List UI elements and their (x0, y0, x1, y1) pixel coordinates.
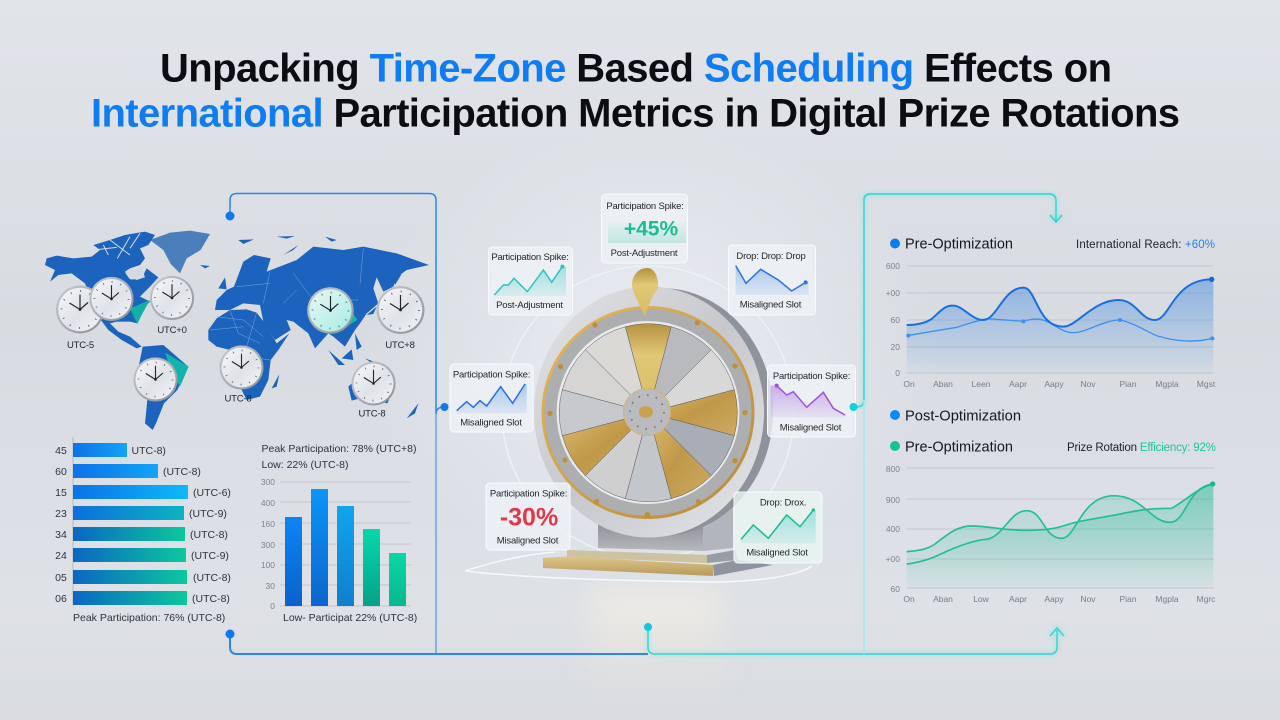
card: -30% drop: Misaligned Slot (497, 536, 559, 546)
callout: prize rotation efficiency: Prize Rotation Efficiency: 92% (1067, 442, 1216, 454)
columns (285, 489, 406, 606)
callout cards (450, 194, 856, 563)
connector node: teal dot on card edge (850, 403, 858, 411)
y axis (886, 464, 900, 594)
wheel stand (543, 505, 773, 576)
map continents (45, 231, 429, 430)
bar values: 60 (55, 466, 67, 478)
card: drop trend (728, 245, 816, 315)
bar values: 06 (55, 593, 67, 605)
column axis: 30 (266, 581, 275, 591)
card: post-adjustment trend: Participation Spike: (491, 252, 569, 263)
y axis: 900 (886, 495, 900, 505)
bar time zone labels: (UTC-8) (163, 466, 201, 478)
x axis: Pian (1119, 594, 1137, 604)
bar values: 23 (55, 508, 67, 520)
clock: Australia (351, 361, 396, 406)
column chart heading: Peak Participation: 78% (UTC+8) (262, 443, 416, 455)
pre-optimization reach chart (886, 236, 1216, 389)
wheel segments (559, 324, 737, 502)
x axis: Leen (972, 379, 991, 389)
column axis: 100 (261, 560, 275, 570)
clock: UTC+0 (150, 276, 194, 320)
column axis: 400 (261, 498, 275, 508)
card: +45% spike: Participation Spike: (606, 201, 684, 212)
x axis: Low (973, 594, 990, 604)
clock labels: UTC-8 (225, 394, 251, 404)
card: -30% drop: -30% (500, 504, 558, 532)
x axis: Aapr (1009, 594, 1027, 604)
x axis: On (903, 594, 915, 604)
title: International Participation Metrics in Digital Prize Rotations (91, 92, 1180, 136)
card: drop trend lower right (734, 492, 822, 563)
x axis: Aapy (1044, 379, 1064, 389)
wheel hub (623, 388, 671, 436)
card: drop trend: Misaligned Slot (740, 300, 802, 310)
callout: international reach: International Reach: +60% (1076, 239, 1215, 251)
card: misaligned slot right: Participation Spike: (773, 371, 850, 382)
y axis: 60 (891, 315, 900, 325)
y axis: 600 (886, 261, 900, 271)
title: Unpacking Time-Zone Based Scheduling Effects on (160, 46, 1112, 90)
card: +45% spike (602, 194, 688, 263)
card: +45% spike: Post-Adjustment (611, 248, 678, 259)
bar values: 45 (55, 445, 67, 457)
bar values: 15 (55, 487, 67, 499)
x axis: Nov (1080, 379, 1096, 389)
x axis: Mgpla (1155, 379, 1179, 389)
title (91, 46, 1180, 136)
clock: UTC-5 left (56, 286, 104, 334)
blue line series (906, 277, 1214, 373)
card: -30% drop: Participation Spike: (490, 488, 567, 500)
wheel pointer (632, 268, 658, 317)
x axis: Aban (933, 379, 953, 389)
bar values: 24 (55, 550, 67, 562)
x axis: Mgrc (1197, 594, 1216, 604)
clock labels (67, 325, 415, 420)
card: misaligned slot right: Misaligned Slot (780, 422, 842, 434)
world map with clocks (45, 231, 429, 430)
x axis: Pian (1119, 379, 1137, 389)
bar time zone labels: (UTC-6) (193, 487, 231, 499)
clock: Africa (219, 345, 264, 390)
horizontal bar chart (55, 437, 231, 624)
card: drop trend lower right: Drop: Drox. (760, 498, 806, 508)
y axis (886, 261, 900, 378)
y axis: +00 (886, 288, 900, 298)
y axis: 20 (891, 342, 900, 352)
card: post-adjustment trend (488, 247, 572, 315)
x axis: Mgpla (1155, 594, 1179, 604)
clock: central Asia teal (307, 287, 354, 334)
bar chart caption: Peak Participation: 76% (UTC-8) (73, 612, 225, 624)
y axis: 60 (891, 584, 900, 594)
card: post-adjustment trend: Post-Adjustment (496, 300, 563, 311)
x axis: Nov (1080, 594, 1096, 604)
legend: Post-Optimization: Post-Optimization (905, 408, 1021, 424)
bar values: 34 (55, 529, 67, 541)
bar time zone labels: (UTC-9) (191, 550, 229, 562)
bar time zone labels: (UTC-8) (190, 529, 228, 541)
clock: UTC+8 (376, 286, 424, 334)
blue connector: map and bars to wheel (226, 194, 648, 654)
x axis: Aban (933, 594, 953, 604)
bars (73, 443, 188, 605)
bar values: 05 (55, 572, 67, 584)
bar values (55, 445, 67, 605)
wheel body (534, 286, 773, 538)
clock labels: UTC+0 (157, 325, 187, 336)
column chart (261, 443, 417, 624)
legend: Pre-Optimization: Pre-Optimization (905, 236, 1013, 252)
card: misaligned slot left (450, 364, 533, 432)
clock labels: UTC-8 (359, 408, 385, 420)
column axis: 0 (270, 601, 275, 611)
column axis: 160 (261, 519, 275, 529)
column chart heading (262, 443, 416, 471)
y axis: 400 (886, 524, 900, 534)
y axis: 0 (895, 368, 900, 378)
card: misaligned slot right (768, 365, 856, 437)
column axis: 300 (261, 540, 275, 550)
card: drop trend lower right: Misaligned Slot (746, 548, 808, 558)
x axis: On (903, 379, 915, 389)
bar time zone labels: UTC-8) (132, 445, 166, 457)
green line series (907, 481, 1215, 588)
x axis (903, 594, 1216, 604)
bar time zone labels: (UTC-8) (193, 572, 231, 584)
wheel pegs (547, 320, 748, 518)
bar time zone labels (132, 445, 231, 605)
orbit ring (465, 266, 812, 582)
bar time zone labels: (UTC-9) (189, 508, 227, 520)
clock: second Americas (89, 277, 134, 321)
x axis (903, 379, 1216, 389)
x axis: Aapr (1009, 379, 1027, 389)
card: -30% drop (486, 483, 570, 550)
column chart heading: Low: 22% (UTC-8) (262, 459, 348, 471)
prize wheel (465, 266, 812, 582)
card: misaligned slot left: Misaligned Slot (460, 418, 522, 428)
clock: South America (133, 357, 178, 402)
bar time zone labels: (UTC-8) (192, 593, 230, 605)
clock labels: UTC+8 (385, 340, 415, 351)
card: drop trend: Drop: Drop: Drop (736, 251, 806, 262)
x axis: Aapy (1044, 594, 1064, 604)
post-optimization efficiency chart (886, 408, 1216, 604)
column axis (261, 477, 275, 611)
clock labels: UTC-5 (67, 340, 94, 351)
teal connector: wheel to optimization charts (644, 194, 1064, 654)
y axis: +00 (886, 554, 900, 564)
x axis: Mgst (1197, 379, 1216, 389)
column chart caption: Low- Participat 22% (UTC-8) (283, 612, 417, 624)
legend: Pre-Optimization green: Pre-Optimization (905, 438, 1013, 456)
y axis: 800 (886, 464, 900, 474)
card: +45% spike: +45% (624, 218, 678, 240)
card: misaligned slot left: Participation Spike: (453, 370, 530, 380)
column axis: 300 (261, 477, 275, 487)
